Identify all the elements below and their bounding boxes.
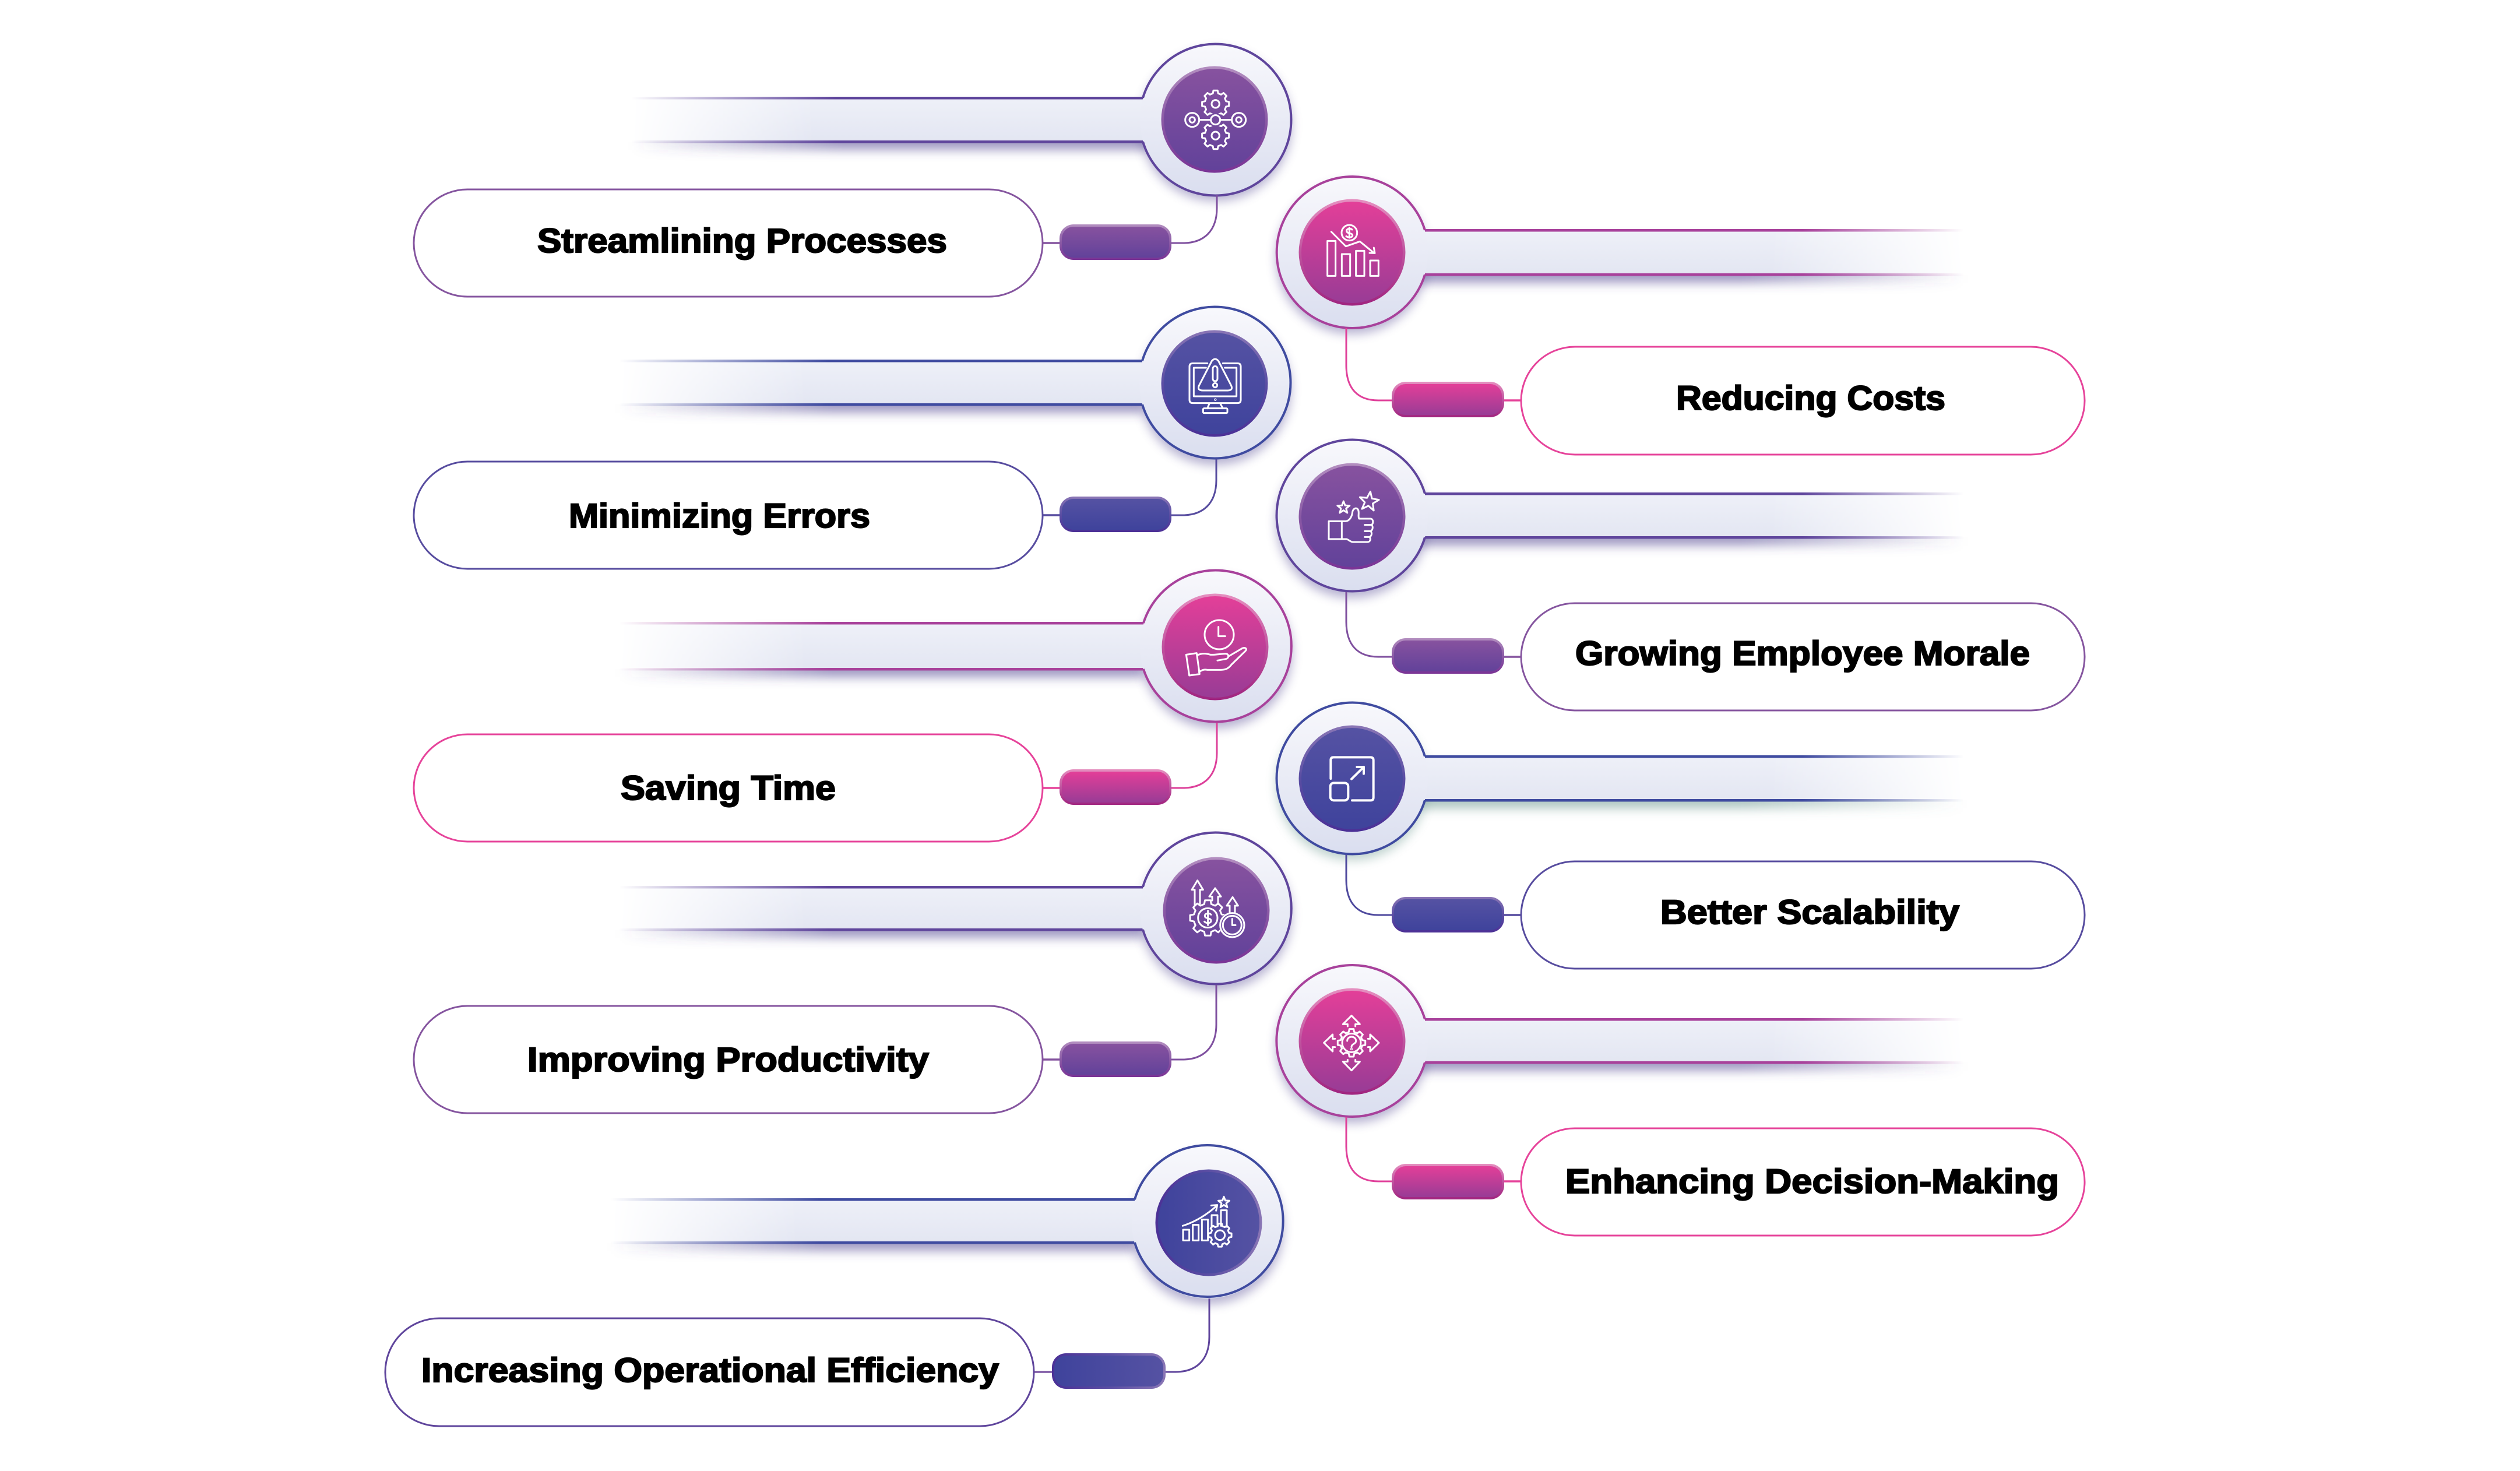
connector: tab to pill bbox=[1043, 514, 1060, 516]
ring outline bbox=[1143, 571, 1291, 722]
panel: Improving Productivity bbox=[414, 832, 1291, 1113]
band bottom line bbox=[619, 928, 1143, 931]
icon: hand with clock bbox=[1186, 620, 1246, 675]
band bottom line bbox=[1425, 536, 1964, 539]
ring bbox=[1139, 308, 1291, 459]
node shadow bbox=[1276, 972, 1428, 1123]
connector: node to tab bbox=[1346, 592, 1392, 657]
icon: growth chart with gear bbox=[1182, 1196, 1231, 1247]
band bbox=[1410, 1019, 1979, 1062]
connector: tab to pill bbox=[1504, 399, 1521, 402]
band bbox=[598, 1199, 1147, 1243]
panel: Saving Time bbox=[414, 571, 1292, 842]
tab bbox=[1392, 638, 1504, 674]
band bbox=[1424, 756, 1933, 800]
node disc bbox=[1155, 1169, 1262, 1276]
band bbox=[618, 98, 1156, 142]
band top line bbox=[619, 622, 1144, 625]
node disc face bbox=[1301, 728, 1403, 829]
label: Enhancing Decision-Making bbox=[1565, 1163, 2059, 1201]
tab bbox=[1392, 382, 1504, 417]
band bbox=[640, 625, 1143, 669]
node disc face bbox=[1166, 860, 1267, 961]
band bottom line bbox=[1425, 273, 1964, 276]
panel: Streamlining Processes bbox=[414, 44, 1291, 297]
panel: Better Scalability bbox=[1276, 703, 2085, 969]
band top line bbox=[1425, 1018, 1964, 1021]
ring bbox=[1132, 1147, 1283, 1298]
connector: tab to pill bbox=[1043, 1058, 1060, 1061]
icon: falling costs chart bbox=[1328, 225, 1378, 276]
connector: tab to pill bbox=[1043, 242, 1060, 244]
ring bbox=[1140, 571, 1291, 723]
band shadow bbox=[1416, 1027, 1964, 1071]
ring outline bbox=[1277, 703, 1425, 854]
ring outline bbox=[1143, 44, 1291, 196]
ring outline bbox=[1135, 1145, 1283, 1297]
node shadow bbox=[1132, 1153, 1283, 1304]
ring bbox=[1140, 44, 1291, 195]
label pill bbox=[1521, 347, 2085, 455]
band top line bbox=[611, 1198, 1135, 1201]
label: Reducing Costs bbox=[1676, 379, 1945, 417]
icon: decision gear with arrows bbox=[1324, 1016, 1379, 1071]
tab bbox=[1060, 1041, 1171, 1077]
connector: node to tab bbox=[1171, 459, 1216, 515]
node disc face bbox=[1301, 991, 1403, 1092]
icon: productivity gear with clock bbox=[1190, 881, 1245, 938]
node disc bbox=[1161, 330, 1268, 437]
band shadow bbox=[611, 1208, 1135, 1251]
label pill bbox=[1521, 603, 2085, 710]
ring outline bbox=[1143, 832, 1291, 984]
connector: tab to pill bbox=[1504, 914, 1521, 916]
panel: Growing Employee Morale bbox=[1276, 439, 2085, 710]
band bottom line bbox=[1425, 799, 1964, 802]
connector: node to tab bbox=[1171, 195, 1217, 243]
band top line bbox=[631, 97, 1143, 99]
node shadow bbox=[1140, 839, 1291, 991]
band shadow bbox=[1416, 502, 1964, 546]
icon: monitor warning bbox=[1189, 359, 1241, 413]
connector: node to tab bbox=[1171, 723, 1217, 788]
band shadow bbox=[619, 369, 1143, 413]
band top line bbox=[1425, 755, 1964, 758]
node shadow bbox=[1276, 446, 1428, 598]
band bottom line bbox=[1425, 1061, 1964, 1064]
icon: thumbs up with stars bbox=[1329, 490, 1380, 542]
label: Improving Productivity bbox=[527, 1041, 929, 1079]
band bottom line bbox=[619, 668, 1144, 670]
tab bbox=[1392, 897, 1504, 932]
connector: node to tab bbox=[1346, 328, 1392, 400]
node shadow bbox=[1276, 709, 1428, 860]
ring outline bbox=[1277, 439, 1425, 591]
node disc bbox=[1163, 857, 1269, 964]
band bbox=[1410, 494, 1979, 537]
connector: tab to pill bbox=[1504, 1180, 1521, 1183]
band shadow bbox=[1416, 238, 1964, 283]
node shadow bbox=[1140, 50, 1291, 201]
node disc face bbox=[1301, 202, 1403, 303]
node shadow bbox=[1276, 182, 1428, 334]
ring bbox=[1140, 833, 1291, 985]
band shadow bbox=[619, 895, 1143, 938]
band bottom line bbox=[631, 140, 1143, 143]
node disc bbox=[1298, 725, 1406, 832]
tab bbox=[1060, 769, 1171, 805]
node disc face bbox=[1158, 1172, 1259, 1273]
label pill bbox=[414, 189, 1043, 297]
label pill bbox=[414, 734, 1043, 842]
band shadow bbox=[1416, 765, 1964, 808]
band bbox=[1410, 230, 1979, 275]
band top line bbox=[1425, 229, 1964, 232]
label pill bbox=[385, 1318, 1034, 1426]
band shadow bbox=[631, 106, 1150, 150]
label pill bbox=[1521, 861, 2085, 969]
node disc bbox=[1298, 988, 1406, 1095]
band bbox=[606, 361, 1155, 404]
node shadow bbox=[1139, 314, 1291, 465]
connector: tab to pill bbox=[1504, 656, 1521, 658]
band bbox=[606, 887, 1155, 930]
tab bbox=[1060, 497, 1171, 532]
node disc face bbox=[1164, 333, 1265, 434]
node disc bbox=[1161, 66, 1268, 173]
panel: Increasing Operational Efficiency bbox=[385, 1145, 1283, 1426]
tab bbox=[1052, 1353, 1166, 1389]
band bottom line bbox=[611, 1241, 1135, 1244]
label: Minimizing Errors bbox=[569, 497, 870, 535]
node disc bbox=[1298, 463, 1406, 570]
ring outline bbox=[1276, 965, 1425, 1117]
node disc bbox=[1298, 199, 1406, 305]
label: Increasing Operational Efficiency bbox=[421, 1352, 999, 1389]
ring bbox=[1276, 966, 1428, 1117]
band top line bbox=[619, 886, 1143, 888]
ring bbox=[1276, 703, 1428, 854]
label pill bbox=[414, 462, 1043, 569]
node disc bbox=[1162, 593, 1268, 701]
connector: tab to pill bbox=[1034, 1371, 1052, 1373]
panel: Minimizing Errors bbox=[414, 307, 1291, 569]
tab bbox=[1392, 1164, 1504, 1199]
ring outline bbox=[1277, 177, 1425, 328]
node disc face bbox=[1164, 69, 1265, 170]
connector: tab to pill bbox=[1043, 787, 1060, 789]
band top line bbox=[1425, 492, 1964, 495]
label: Streamlining Processes bbox=[537, 222, 947, 260]
ring bbox=[1276, 441, 1428, 592]
tab bbox=[1060, 224, 1171, 260]
label pill bbox=[1521, 1128, 2085, 1236]
connector: node to tab bbox=[1171, 985, 1216, 1060]
label: Growing Employee Morale bbox=[1575, 635, 2030, 673]
node shadow bbox=[1141, 577, 1292, 729]
connector: node to tab bbox=[1346, 854, 1392, 915]
band shadow bbox=[619, 631, 1143, 677]
icon: gears network bbox=[1185, 90, 1246, 149]
label: Saving Time bbox=[621, 769, 836, 807]
ring outline bbox=[1142, 307, 1290, 458]
connector: node to tab bbox=[1166, 1298, 1209, 1372]
band bottom line bbox=[619, 403, 1142, 406]
icon: scale up squares bbox=[1331, 757, 1374, 800]
panel: Enhancing Decision-Making bbox=[1276, 965, 2085, 1236]
label pill bbox=[414, 1006, 1043, 1113]
label: Better Scalability bbox=[1660, 893, 1959, 931]
panel: Reducing Costs bbox=[1276, 177, 2085, 455]
node disc face bbox=[1164, 596, 1266, 698]
node disc face bbox=[1301, 466, 1403, 567]
connector: node to tab bbox=[1346, 1117, 1392, 1181]
ring bbox=[1276, 177, 1428, 328]
band top line bbox=[619, 360, 1142, 363]
